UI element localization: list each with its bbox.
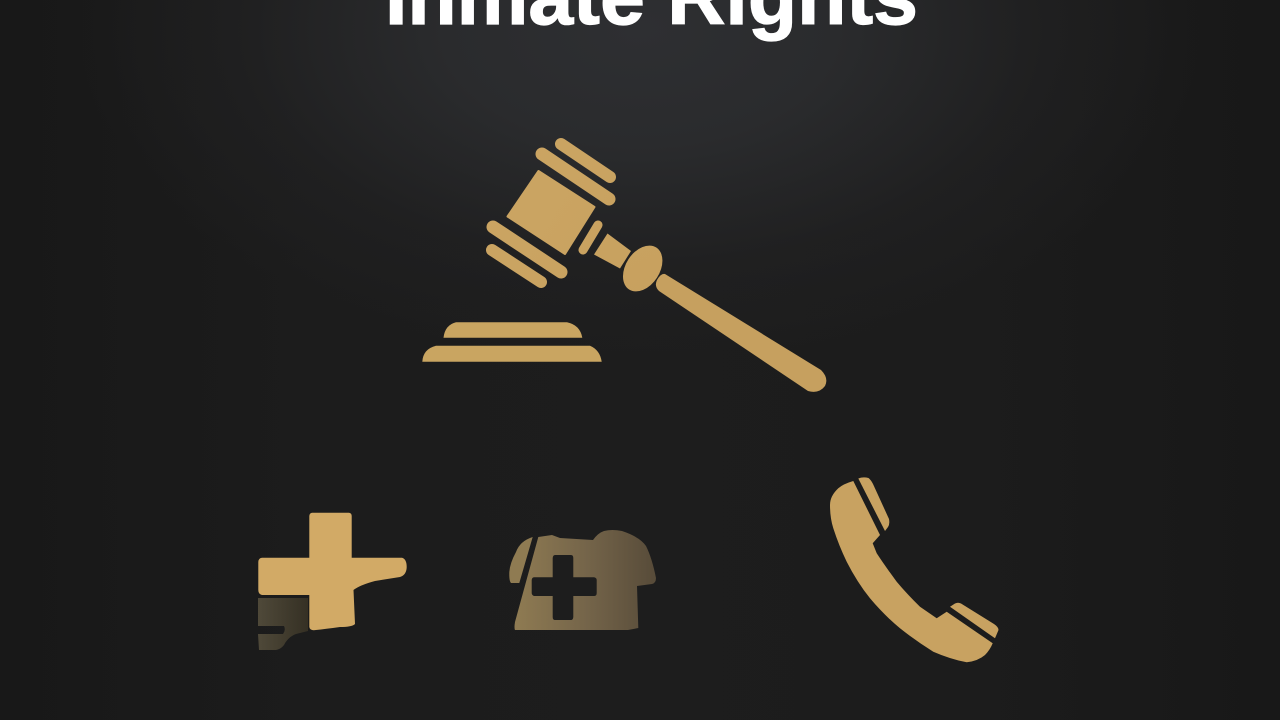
phone mouthpiece [950, 603, 998, 638]
gavel head [492, 144, 610, 282]
shirt cross cut-out [532, 555, 597, 620]
shirt body [514, 530, 656, 630]
gavel handle [656, 274, 826, 392]
icon: gavel [422, 144, 826, 392]
faded cross fragment [258, 598, 308, 650]
icon: medical shirt [509, 530, 656, 630]
gold cross [258, 513, 407, 630]
shirt sleeve [509, 537, 533, 583]
icon: telephone [830, 477, 998, 662]
gavel neck and collar [594, 234, 671, 299]
phone handset [830, 481, 993, 662]
gavel sound block [422, 322, 602, 362]
phone earpiece [858, 477, 889, 531]
icon: medical cross [258, 513, 407, 650]
